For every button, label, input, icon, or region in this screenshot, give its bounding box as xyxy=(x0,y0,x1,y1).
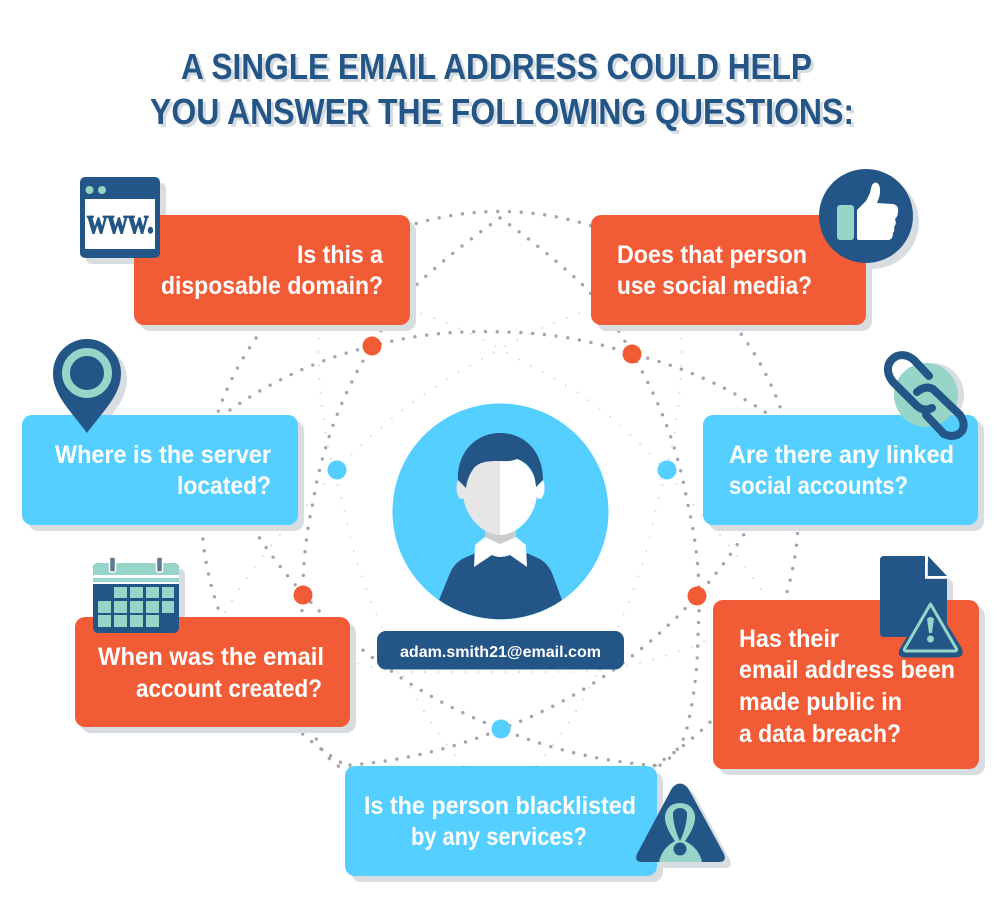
icon: chain links xyxy=(888,355,964,436)
hair xyxy=(458,433,543,488)
orbit network xyxy=(202,212,798,808)
avatar xyxy=(392,404,608,620)
panel: server location: Where is the server xyxy=(55,441,271,469)
title: A SINGLE EMAIL ADDRESS COULD HELP xyxy=(181,46,812,87)
panel: blacklisted xyxy=(345,766,663,882)
icon: browser www: www. xyxy=(87,201,154,242)
icon: calendar xyxy=(93,557,179,633)
panel: linked accounts xyxy=(703,415,984,531)
panel: social media: Does that person xyxy=(617,241,807,269)
panel: data breach: Has their xyxy=(739,625,839,653)
icon: document warning xyxy=(880,556,961,656)
face xyxy=(463,455,500,535)
title: YOU ANSWER THE FOLLOWING QUESTIONS: xyxy=(150,91,854,132)
collar xyxy=(474,537,527,567)
panel: disposable domain xyxy=(134,215,416,331)
panel: data breach xyxy=(713,600,985,775)
panel: server location xyxy=(22,415,304,531)
icon: warning person xyxy=(636,784,725,862)
panel: blacklisted: by any services? xyxy=(411,823,587,851)
icon: map pin xyxy=(53,339,121,433)
ears xyxy=(456,477,466,499)
panel: data breach: a data breach? xyxy=(739,720,901,748)
icon: browser www xyxy=(80,177,160,258)
body xyxy=(439,551,562,619)
email label: adam.smith21@email.com xyxy=(400,644,601,661)
panel: disposable domain: disposable domain? xyxy=(161,272,383,300)
panel: data breach: email address been xyxy=(739,656,955,684)
panel: linked accounts: social accounts? xyxy=(729,472,908,500)
panel: blacklisted: Is the person blacklisted xyxy=(364,792,636,820)
panel: linked accounts: Are there any linked xyxy=(729,441,954,469)
panel: account created xyxy=(75,617,356,733)
panel: social media: use social media? xyxy=(617,272,812,300)
panel: disposable domain: Is this a xyxy=(297,241,384,269)
neck xyxy=(485,528,516,544)
panel: account created: account created? xyxy=(136,675,322,703)
title xyxy=(150,46,854,132)
icon drop shadows xyxy=(59,175,964,868)
panel: server location: located? xyxy=(177,472,271,500)
panel: social media xyxy=(591,215,872,331)
icon: thumbs up xyxy=(819,169,913,263)
panel: data breach: made public in xyxy=(739,688,902,716)
panel: account created: When was the email xyxy=(98,643,324,671)
email label xyxy=(377,631,624,670)
node dots xyxy=(294,336,706,738)
